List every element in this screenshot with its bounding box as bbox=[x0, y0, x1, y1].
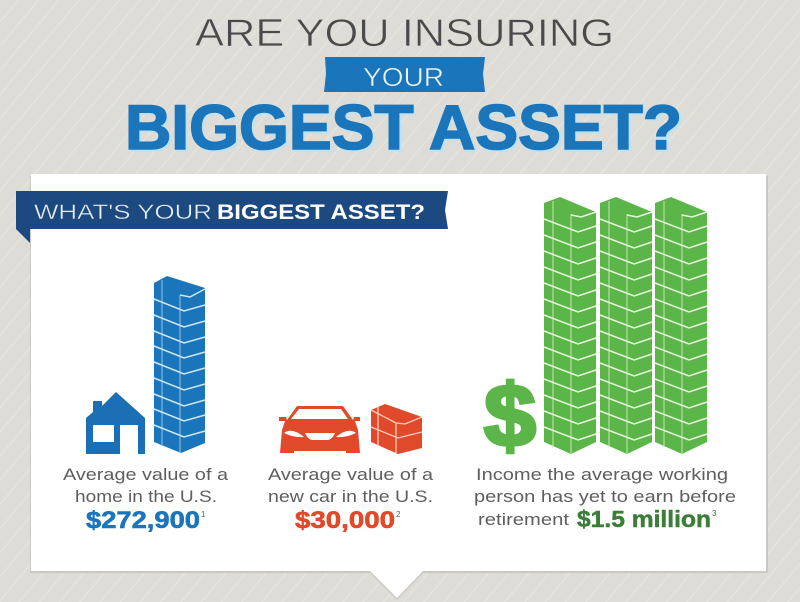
icon: car bbox=[279, 406, 360, 453]
label: car value: Average value of a bbox=[268, 465, 434, 484]
section banner bbox=[16, 191, 448, 243]
label: car value bbox=[268, 465, 434, 534]
title line: are you insuring: ARE YOU INSURING bbox=[195, 12, 614, 55]
bar: blue money stack bbox=[154, 276, 205, 453]
title line: biggest asset: BIGGEST ASSET? bbox=[127, 95, 684, 165]
label: income to earn: $1.5 million bbox=[577, 506, 711, 532]
ribbon: your bbox=[324, 57, 485, 92]
label: income to earn: person has yet to earn before bbox=[474, 487, 736, 506]
section banner: WHAT'S YOUR bbox=[34, 201, 212, 224]
label: home value: Average value of a bbox=[63, 465, 229, 484]
label: car value: $30,000 bbox=[295, 507, 395, 534]
title line: biggest asset: BIGGEST ASSET? bbox=[125, 93, 682, 163]
bar: green money stacks bbox=[544, 197, 707, 454]
ribbon: your: YOUR bbox=[363, 62, 444, 92]
label: home value bbox=[63, 465, 229, 534]
label: home value: 1 bbox=[201, 510, 206, 519]
label: income to earn bbox=[474, 465, 736, 532]
label: income to earn: 3 bbox=[712, 509, 717, 518]
label: car value: new car in the U.S. bbox=[268, 487, 433, 506]
panel: what's your biggest asset bbox=[16, 174, 768, 600]
label: income to earn: Income the average working bbox=[476, 465, 728, 484]
label: car value: 2 bbox=[396, 510, 401, 519]
icon: house bbox=[86, 392, 145, 454]
label: home value: home in the U.S. bbox=[75, 487, 217, 506]
label: home value: $272,900 bbox=[86, 507, 200, 534]
bar: red money stack bbox=[371, 404, 422, 454]
icon: dollar sign: $ bbox=[484, 366, 536, 465]
label: income to earn: retirement bbox=[478, 510, 569, 529]
section banner: BIGGEST ASSET? bbox=[217, 201, 425, 224]
